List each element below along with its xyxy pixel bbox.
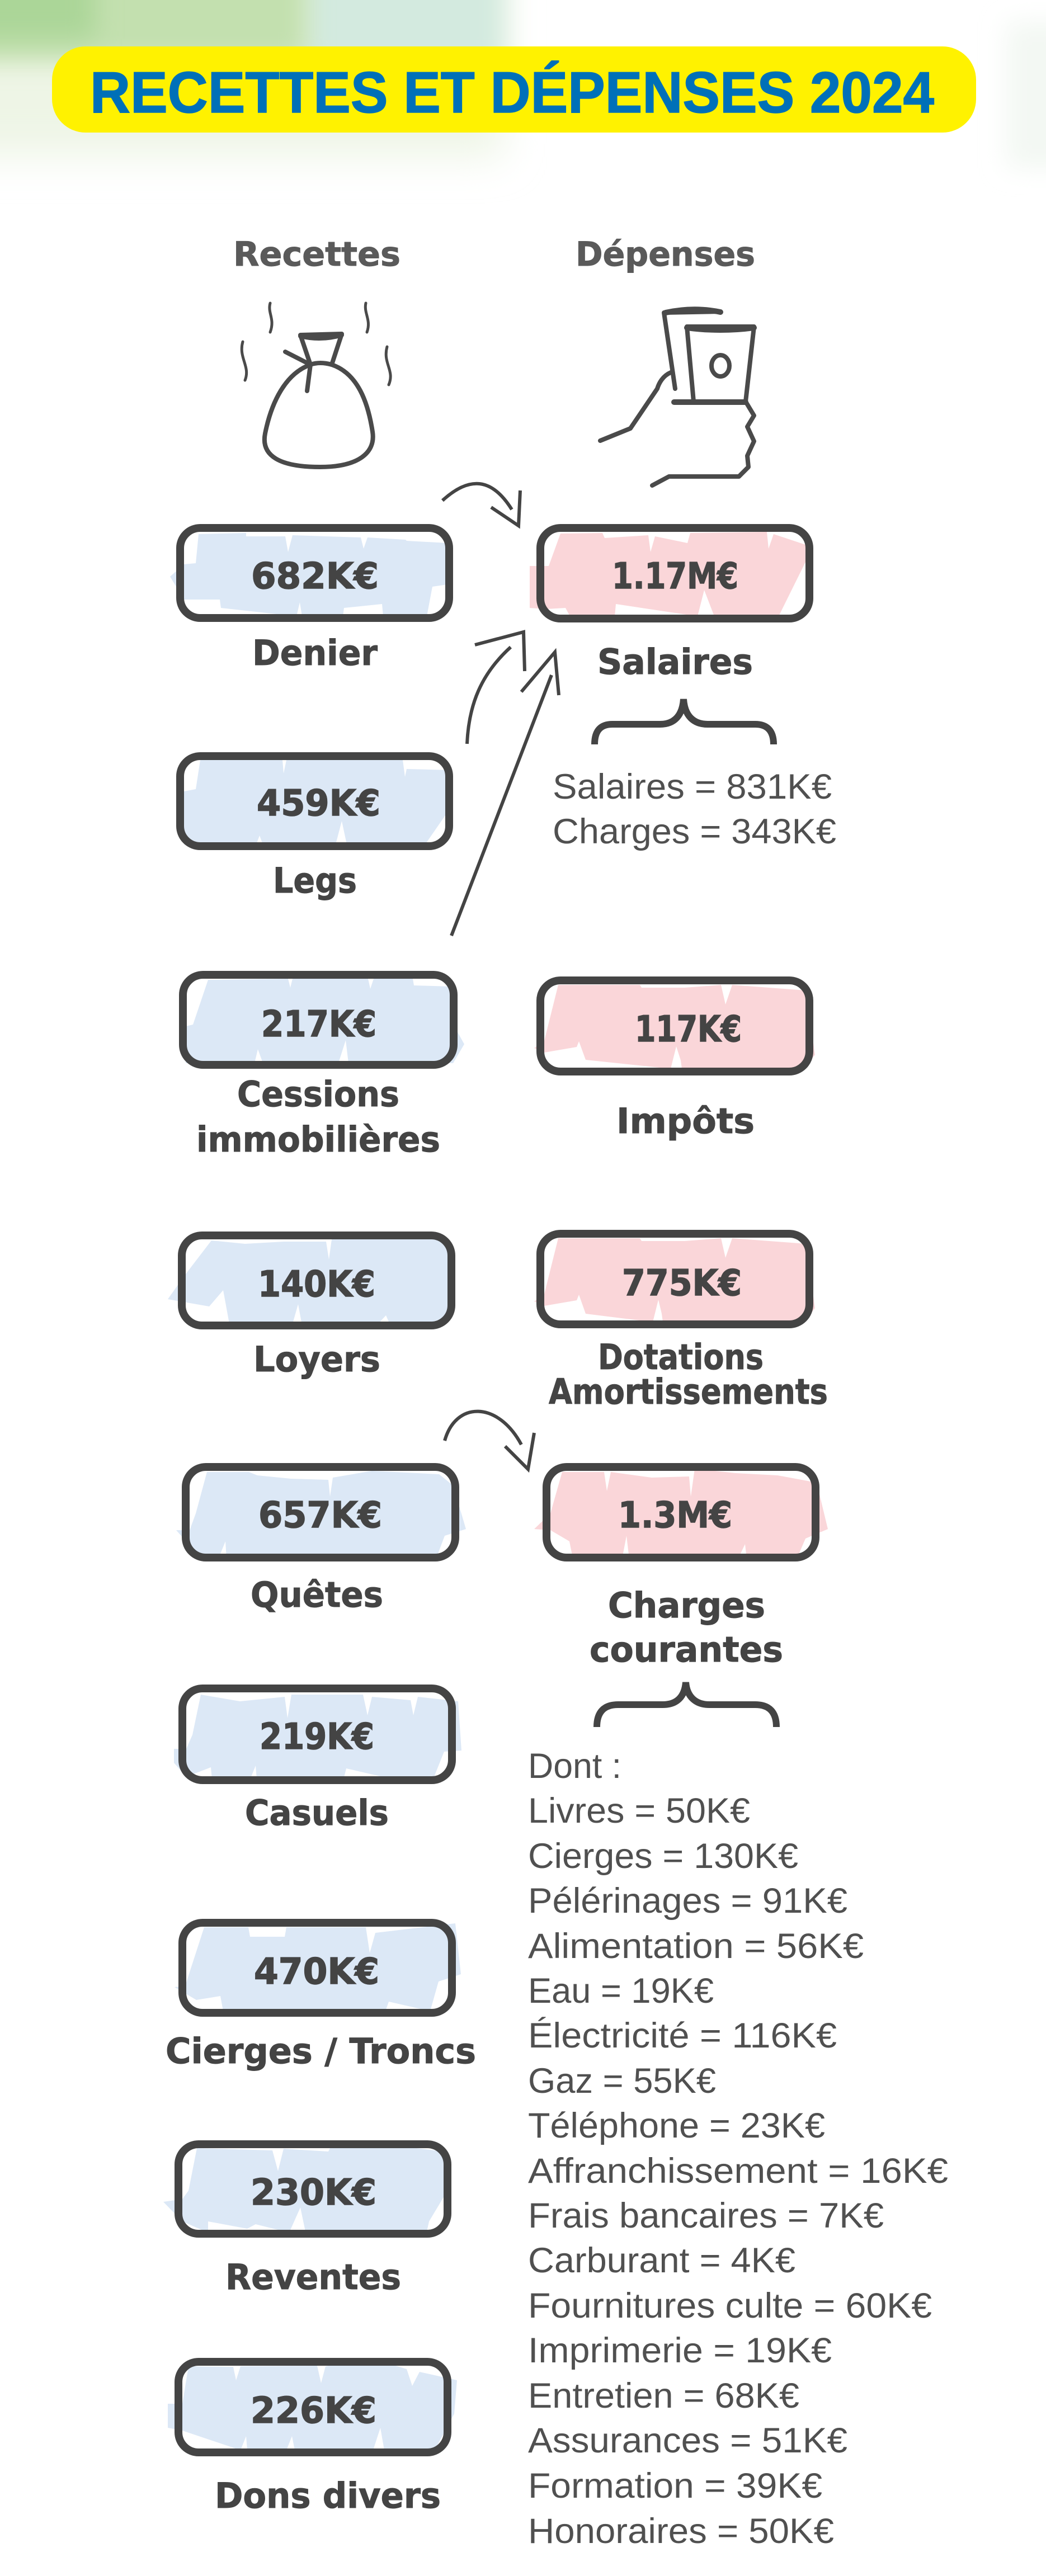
panel: Quêtes <box>176 1467 466 1615</box>
box: Dotations <box>534 1234 815 1324</box>
brace <box>595 699 774 744</box>
breakdown list: Eau = 19K€ <box>528 1971 714 2011</box>
panel: Legs <box>180 756 450 901</box>
arrow: Quêtes to Charges courantes <box>445 1412 534 1469</box>
breakdown <box>553 767 836 851</box>
title: RECETTES ET DÉPENSES 2024 <box>90 60 934 125</box>
box: Loyers <box>168 1235 452 1325</box>
breakdown list: Alimentation = 56K€ <box>528 1927 864 1966</box>
panel: Charges courantes <box>528 1467 948 2551</box>
panel: Casuels <box>174 1688 461 1833</box>
background: green wash <box>0 0 1046 168</box>
amount: 219K€ <box>260 1716 374 1758</box>
label <box>549 1337 828 1412</box>
panel: Impôts <box>534 980 815 1141</box>
amount: 470K€ <box>254 1951 379 1993</box>
breakdown list: Pélérinages = 91K€ <box>528 1881 847 1921</box>
amount: 459K€ <box>257 783 380 824</box>
box: Cessions <box>183 975 464 1065</box>
box: Legs <box>180 756 450 846</box>
box: Dons divers <box>168 2358 457 2452</box>
label: Legs <box>273 860 357 901</box>
arrow: Cessions to Salaires <box>451 652 559 936</box>
label: Denier <box>252 633 378 673</box>
panel: Cierges / Troncs <box>166 1923 476 2072</box>
label: Dotations <box>598 1337 764 1377</box>
breakdown list: Assurances = 51K€ <box>528 2421 847 2460</box>
breakdown list: Fournitures culte = 60K€ <box>528 2286 932 2325</box>
breakdown list: Entretien = 68K€ <box>528 2376 799 2415</box>
breakdown list: Imprimerie = 19K€ <box>528 2331 832 2370</box>
arrow: Legs to Salaires <box>467 632 525 744</box>
breakdown list: Téléphone = 23K€ <box>528 2106 825 2145</box>
label: Salaires <box>597 641 753 682</box>
label: immobilières <box>196 1119 440 1160</box>
label: Reventes <box>225 2257 401 2297</box>
breakdown list: Carburant = 4K€ <box>528 2241 795 2280</box>
breakdown list <box>528 1747 948 2551</box>
breakdown list: Gaz = 55K€ <box>528 2061 716 2101</box>
panel: Dotations Amortissements <box>534 1234 828 1412</box>
icon: money bag <box>242 303 390 467</box>
label: Cessions <box>237 1074 399 1115</box>
box: Reventes <box>163 2140 447 2234</box>
label: Quêtes <box>251 1574 383 1615</box>
brace <box>597 1682 776 1727</box>
heading: Recettes: Recettes <box>233 235 401 274</box>
amount: 230K€ <box>251 2172 376 2214</box>
box: Casuels <box>174 1688 461 1780</box>
label <box>590 1585 783 1670</box>
breakdown: Charges = 343K€ <box>553 812 836 851</box>
box: Charges <box>534 1467 828 1561</box>
breakdown list: Formation = 39K€ <box>528 2466 822 2506</box>
panel: Dons divers <box>168 2358 457 2516</box>
box: Impôts <box>534 980 815 1072</box>
amount: 117K€ <box>635 1009 742 1050</box>
panel: Reventes <box>163 2140 447 2297</box>
amount: 1.3M€ <box>618 1495 732 1536</box>
label: Charges <box>608 1585 765 1626</box>
breakdown list: Cierges = 130K€ <box>528 1837 798 1876</box>
box: Quêtes <box>176 1467 466 1559</box>
breakdown list: Électricité = 116K€ <box>528 2016 837 2055</box>
amount: 1.17M€ <box>612 556 738 597</box>
panel: Denier <box>170 528 449 673</box>
amount: 682K€ <box>251 556 379 597</box>
amount: 140K€ <box>258 1264 375 1305</box>
label: Cierges / Troncs <box>166 2031 476 2072</box>
box: Cierges <box>175 1923 461 2013</box>
label: Loyers <box>253 1339 380 1380</box>
heading: Dépenses: Dépenses <box>576 235 755 274</box>
breakdown list: Affranchissement = 16K€ <box>528 2152 948 2191</box>
label: Amortissements <box>549 1371 828 1412</box>
breakdown list: Frais bancaires = 7K€ <box>528 2196 884 2235</box>
icon: hand holding phone <box>600 309 754 485</box>
label: Dons divers <box>215 2475 441 2516</box>
amount: 217K€ <box>261 1004 376 1045</box>
label <box>196 1074 440 1160</box>
amount: 657K€ <box>258 1495 382 1536</box>
breakdown list: Honoraires = 50K€ <box>528 2512 834 2551</box>
label: Impôts <box>616 1101 755 1141</box>
label: Casuels <box>245 1792 389 1833</box>
amount: 775K€ <box>622 1263 742 1304</box>
breakdown list: Livres = 50K€ <box>528 1791 750 1830</box>
panel: Loyers <box>168 1235 452 1380</box>
box: Denier <box>170 528 449 618</box>
title banner <box>52 46 976 133</box>
box: Salaires <box>530 528 811 619</box>
label: courantes <box>590 1629 783 1670</box>
panel: Salaires <box>530 528 836 851</box>
breakdown list: Dont : <box>528 1747 621 1786</box>
arrow: Denier to Salaires <box>442 484 520 526</box>
amount: 226K€ <box>251 2390 376 2432</box>
breakdown: Salaires = 831K€ <box>553 767 832 806</box>
panel: Cessions immobilières <box>183 975 464 1160</box>
